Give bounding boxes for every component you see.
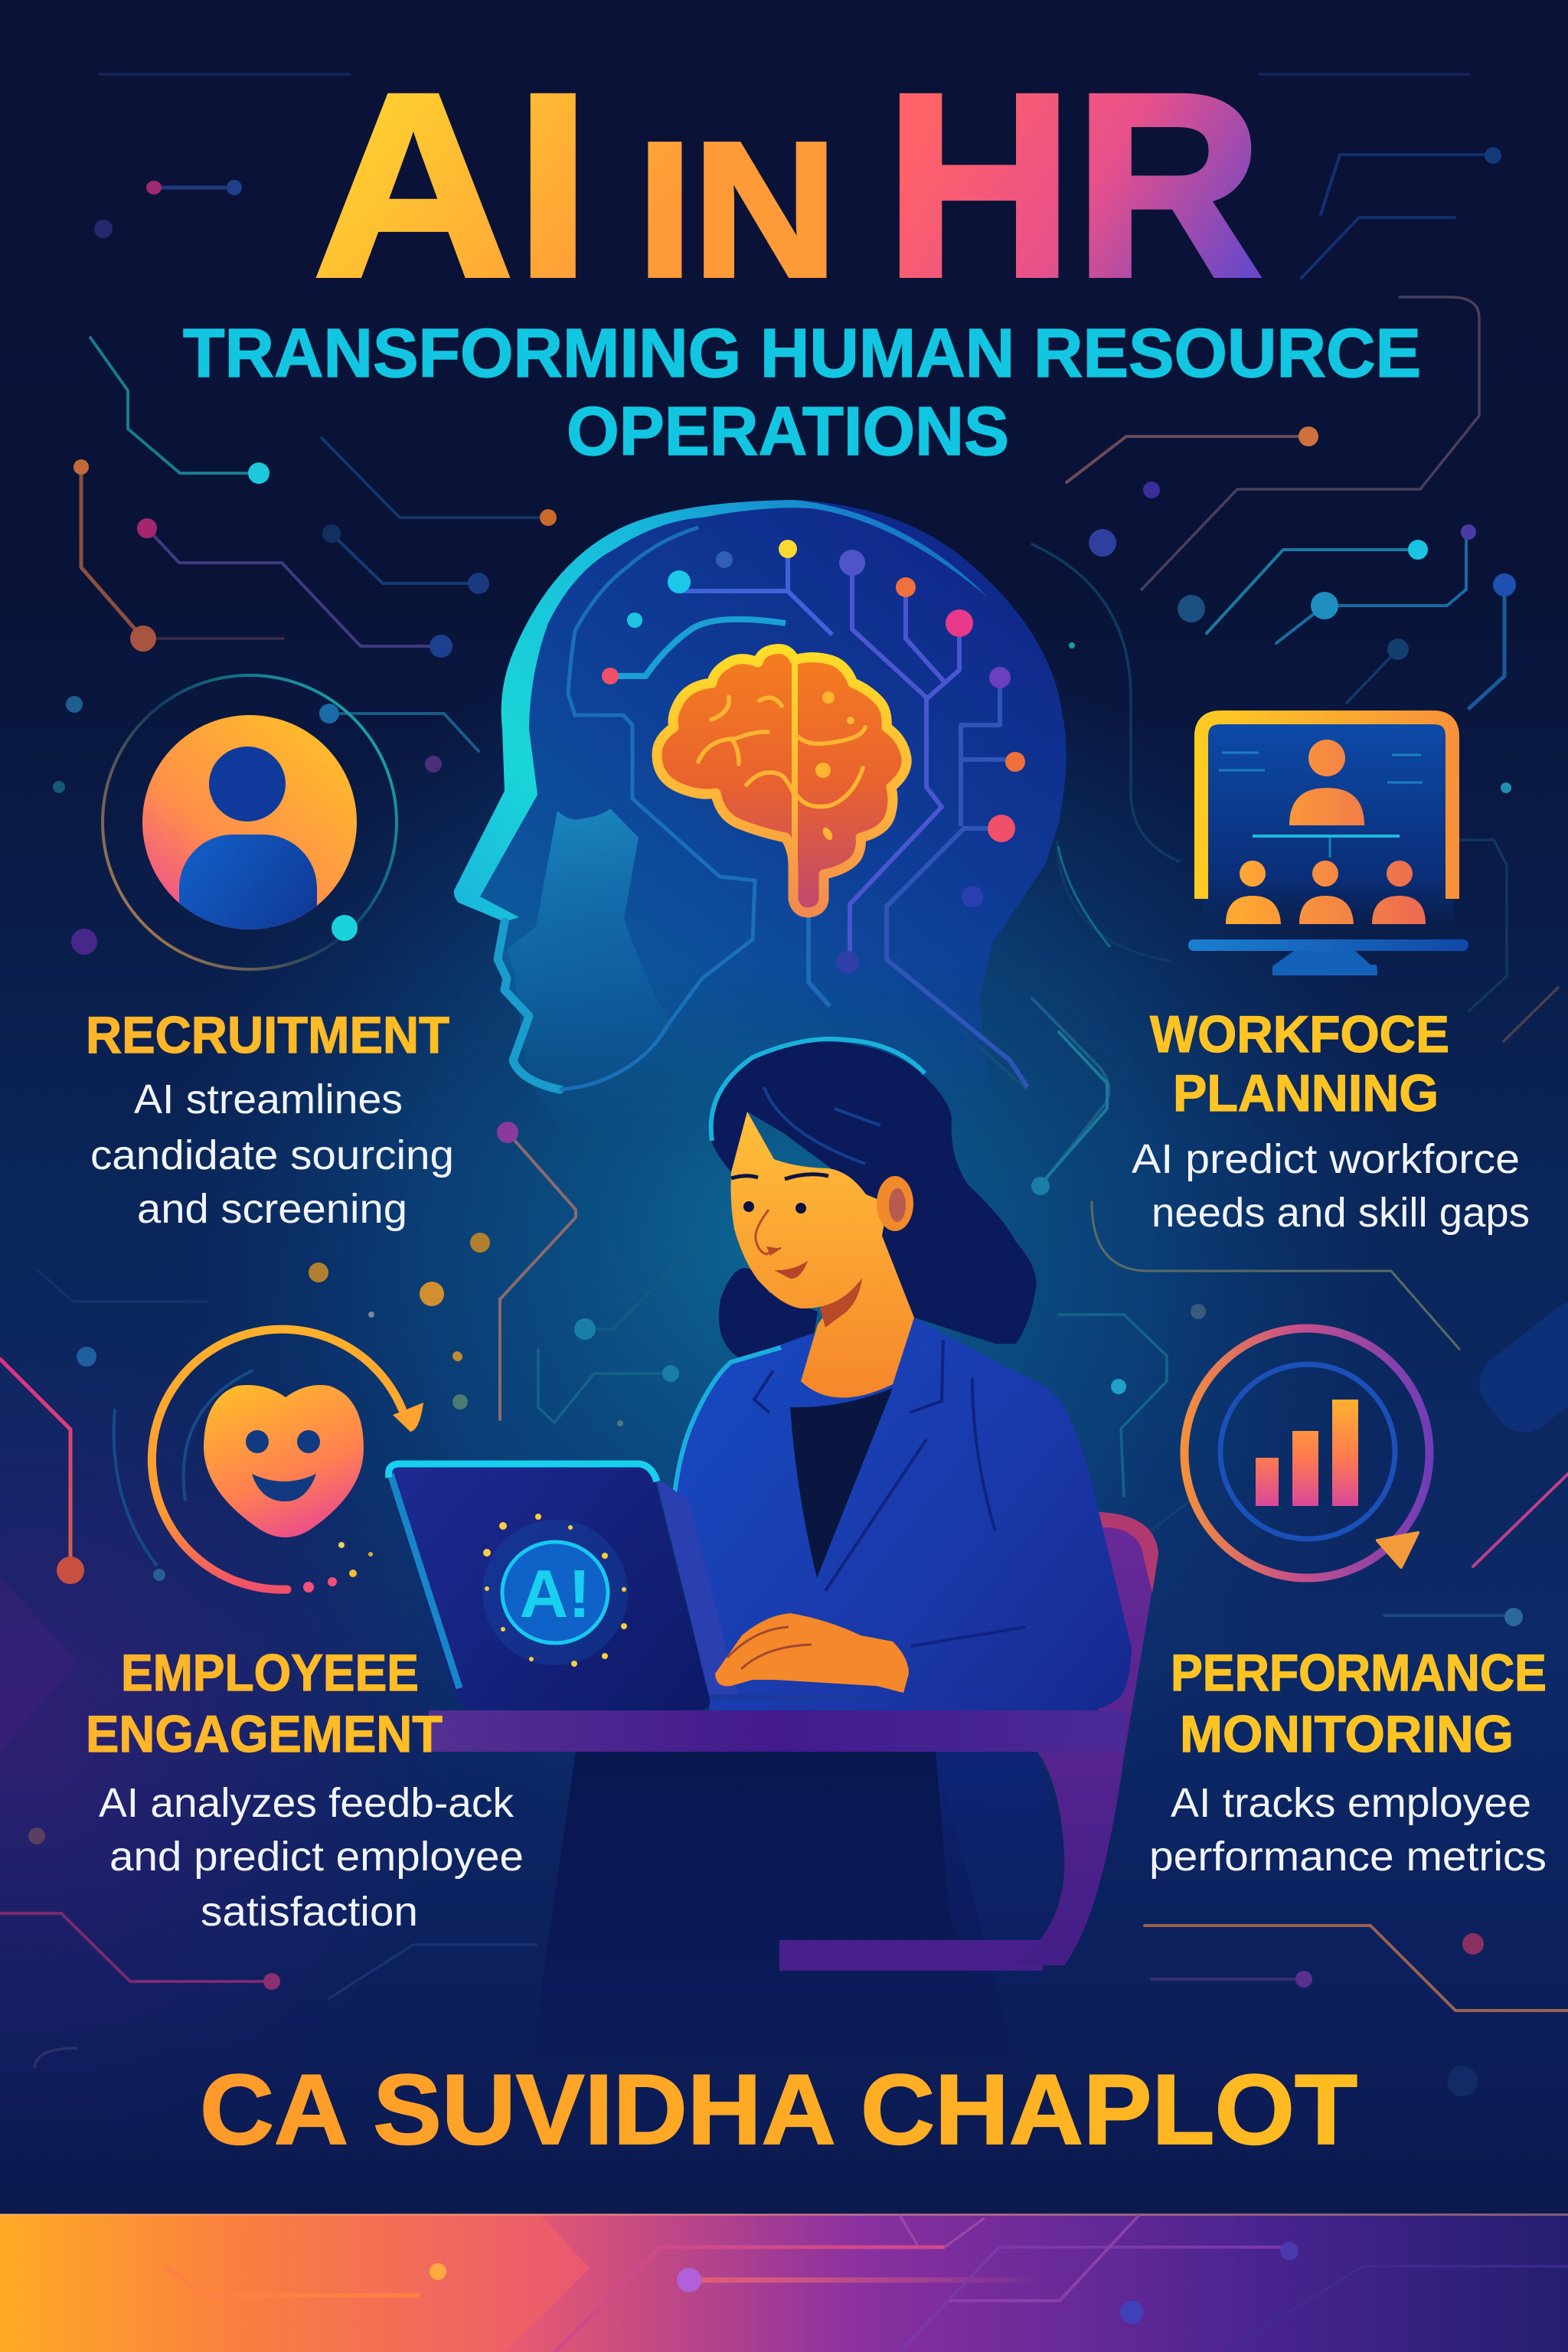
head nodes bbox=[602, 540, 1025, 974]
text: recruitment description: and screening bbox=[137, 1186, 407, 1232]
inner trace lines bbox=[560, 528, 755, 1089]
heading: employee engagement: ENGAGEMENT bbox=[86, 1705, 443, 1763]
heading: recruitment bbox=[86, 1006, 454, 1232]
text: engagement description: satisfaction bbox=[201, 1889, 418, 1935]
text: performance description: performance metrics bbox=[1149, 1834, 1547, 1880]
author name: CA SUVIDHA CHAPLOT bbox=[200, 2053, 1357, 2165]
woman at laptop illustration bbox=[387, 1039, 1158, 2082]
heading: employee engagement bbox=[86, 1644, 524, 1935]
text: recruitment description: candidate sourcing bbox=[90, 1132, 454, 1178]
jacket lapels bbox=[754, 1340, 1026, 1646]
text: engagement description: and predict employee bbox=[109, 1834, 524, 1880]
heading: employee engagement: EMPLOYEEE bbox=[121, 1644, 419, 1702]
text: workforce description: AI predict workforce bbox=[1132, 1136, 1520, 1182]
title: AI in HR: IN bbox=[637, 103, 838, 316]
text: engagement description: AI analyzes feedb-ack bbox=[99, 1780, 514, 1826]
face bbox=[730, 1112, 888, 1308]
text: recruitment description bbox=[90, 1076, 454, 1232]
icon: performance monitoring chart bbox=[1184, 1328, 1429, 1578]
laptop bbox=[387, 1464, 861, 1710]
legs bbox=[528, 1752, 1021, 2082]
text: recruitment description: AI streamlines bbox=[134, 1076, 403, 1122]
subtitle bbox=[183, 315, 1421, 470]
heading: workforce planning bbox=[1132, 1005, 1530, 1236]
text: engagement description bbox=[99, 1780, 524, 1935]
back hair bbox=[719, 1268, 818, 1362]
heading: workforce planning: WORKFOCE bbox=[1150, 1005, 1449, 1063]
head thick outline bbox=[454, 500, 988, 922]
title: AI in HR: AI bbox=[312, 39, 592, 332]
lower profile outline bbox=[498, 922, 560, 1089]
title: AI in HR bbox=[312, 39, 1263, 332]
laptop: A! bbox=[520, 1556, 590, 1632]
heading: performance monitoring: MONITORING bbox=[1180, 1705, 1514, 1763]
icon: employee engagement heart bbox=[114, 1329, 423, 1592]
hair bbox=[709, 1042, 1037, 1344]
subtitle: OPERATIONS bbox=[567, 394, 1009, 470]
hand bbox=[715, 1613, 909, 1693]
chair bbox=[779, 1508, 1158, 1971]
central head with circuits bbox=[454, 500, 1110, 1125]
neck bbox=[801, 1236, 914, 1398]
text: workforce description: needs and skill gaps bbox=[1152, 1190, 1530, 1236]
icon: brain bbox=[657, 649, 906, 913]
text: performance description: AI tracks employee bbox=[1171, 1780, 1531, 1826]
icon: recruitment person bbox=[103, 675, 397, 969]
decorative dots bbox=[28, 147, 1523, 2096]
text: performance description bbox=[1149, 1780, 1547, 1880]
face highlight bbox=[507, 808, 674, 1089]
jacket bbox=[672, 1318, 1132, 1710]
text: workforce description bbox=[1132, 1136, 1530, 1236]
desk bbox=[429, 1710, 1125, 1752]
subtitle: TRANSFORMING HUMAN RESOURCE bbox=[183, 315, 1421, 392]
ear bbox=[877, 1176, 913, 1231]
heading: performance monitoring bbox=[1149, 1644, 1547, 1880]
heading: recruitment: RECRUITMENT bbox=[86, 1006, 449, 1064]
footer gradient band bbox=[0, 2213, 1568, 2352]
icon: workforce planning monitor bbox=[1188, 717, 1468, 975]
title: AI in HR: HR bbox=[884, 39, 1263, 332]
shirt bbox=[790, 1388, 893, 1578]
head circuit lines bbox=[610, 549, 1110, 1087]
facial features bbox=[731, 1174, 828, 1279]
head silhouette fill bbox=[454, 500, 1067, 1125]
heading: workforce planning: PLANNING bbox=[1173, 1064, 1439, 1122]
heading: performance monitoring: PERFORMANCE bbox=[1171, 1644, 1547, 1702]
